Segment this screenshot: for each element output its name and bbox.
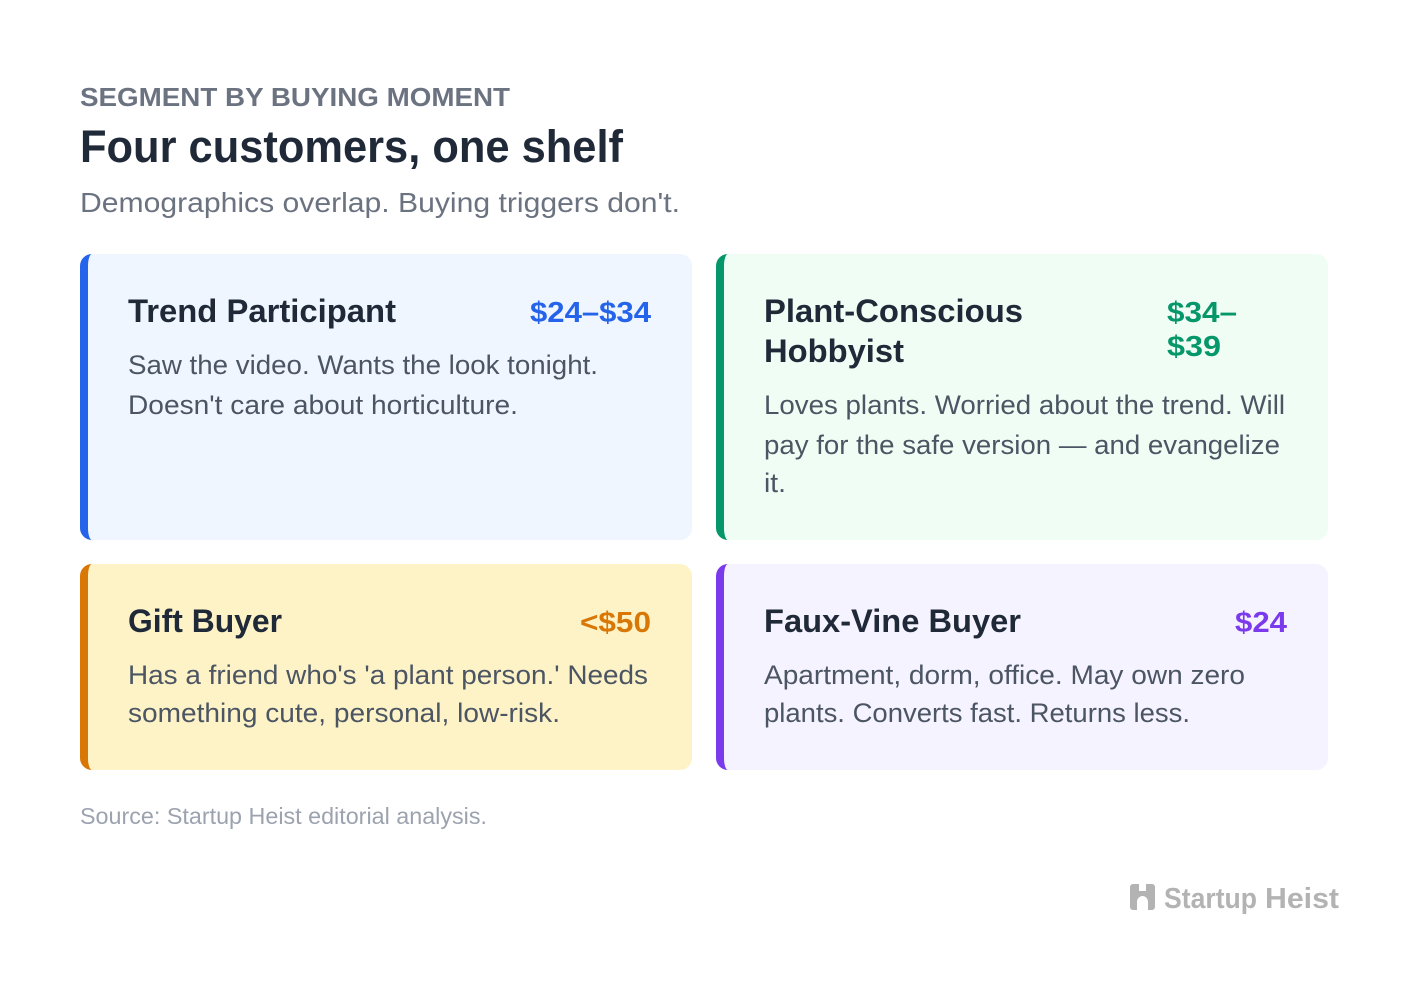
subtitle: Demographics overlap. Buying triggers don't. xyxy=(80,187,680,218)
price range: $24–$34 xyxy=(530,297,651,329)
price: $24 xyxy=(1235,607,1287,639)
price range: $39 xyxy=(1167,331,1221,363)
description: Has a friend who's 'a plant person.' Needs xyxy=(128,660,648,690)
wordmark xyxy=(1164,883,1339,915)
source note: Source: Startup Heist editorial analysis. xyxy=(80,803,487,829)
description: Loves plants. Worried about the trend. Will xyxy=(764,390,1285,420)
title: Four customers, one shelf xyxy=(80,121,624,172)
price range: $34– xyxy=(1167,297,1237,329)
wordmark: Heist xyxy=(1265,883,1339,915)
description xyxy=(764,390,1285,498)
panel: Faux-Vine Buyer xyxy=(716,564,1328,770)
description: Doesn't care about horticulture. xyxy=(128,390,518,420)
logo: Startup Heist xyxy=(1130,883,1339,915)
panel: Trend Participant xyxy=(80,254,692,540)
description: pay for the safe version — and evangelize xyxy=(764,430,1280,460)
segment name: Faux-Vine Buyer xyxy=(764,603,1021,639)
price: <$50 xyxy=(580,607,651,639)
eyebrow heading: SEGMENT BY BUYING MOMENT xyxy=(80,82,510,112)
segment name: Trend Participant xyxy=(128,293,396,329)
description: it. xyxy=(764,468,786,498)
description xyxy=(128,660,648,728)
description: plants. Converts fast. Returns less. xyxy=(764,698,1190,728)
wordmark: Startup xyxy=(1164,883,1257,915)
segment name: Plant-Conscious xyxy=(764,293,1023,329)
segment name: Gift Buyer xyxy=(128,603,282,639)
description: Saw the video. Wants the look tonight. xyxy=(128,350,598,380)
description xyxy=(764,660,1245,728)
segment name: Hobbyist xyxy=(764,333,904,369)
segment name xyxy=(764,293,1023,369)
price range xyxy=(1167,297,1237,363)
description: Apartment, dorm, office. May own zero xyxy=(764,660,1245,690)
description: something cute, personal, low-risk. xyxy=(128,698,560,728)
panel: Gift Buyer xyxy=(80,564,692,770)
icon: H mark xyxy=(1130,884,1155,910)
panel: Plant-Conscious Hobbyist xyxy=(716,254,1328,540)
description xyxy=(128,350,598,420)
